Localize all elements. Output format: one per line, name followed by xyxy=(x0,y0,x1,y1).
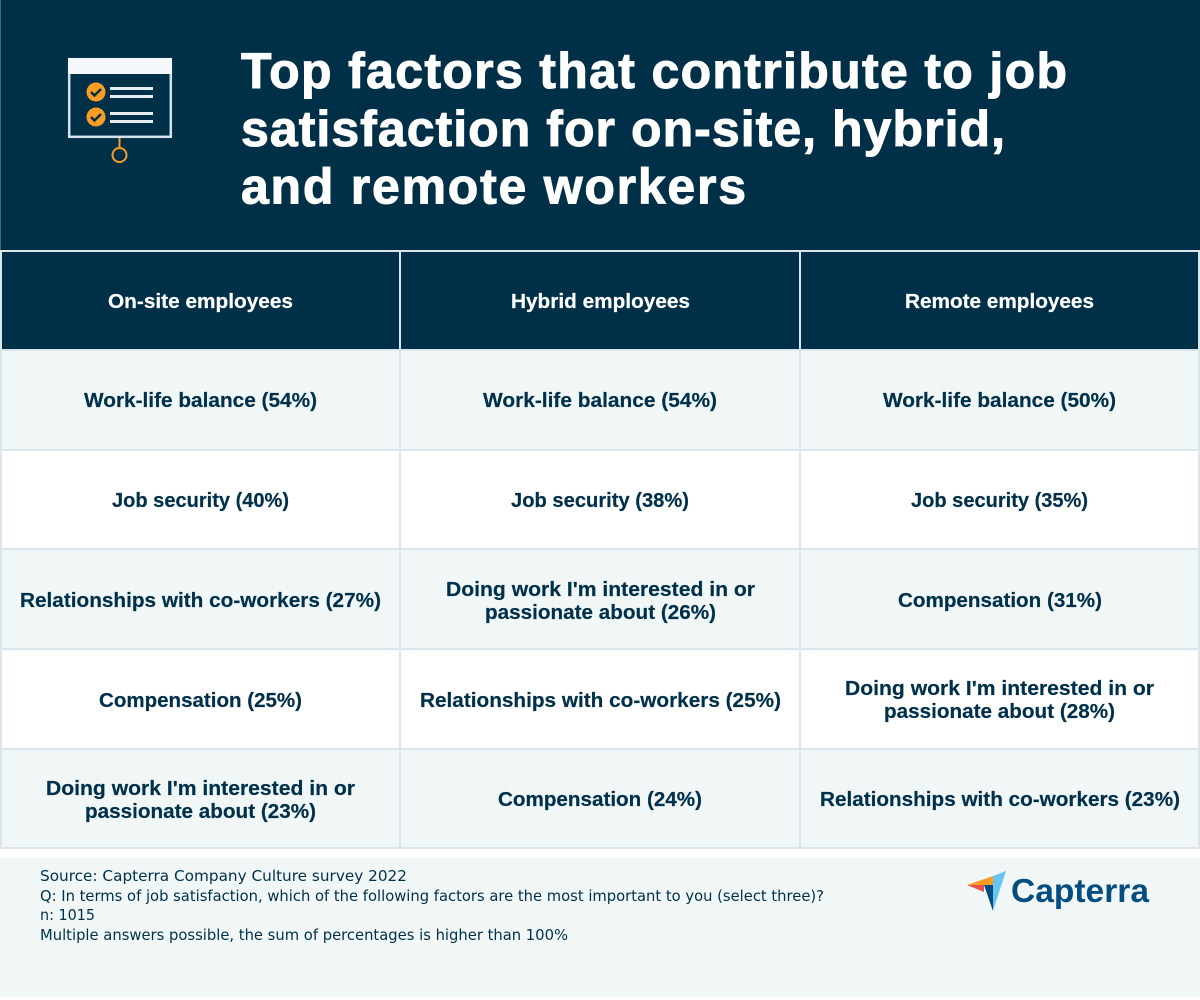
title: Top factors that contribute to job xyxy=(241,43,1067,99)
source notes xyxy=(40,867,824,944)
row 1: Work-life balance (54%) xyxy=(483,390,717,412)
row 3 xyxy=(20,579,1102,624)
row 3: Compensation (31%) xyxy=(898,590,1102,612)
row 1: Work-life balance (50%) xyxy=(883,390,1116,412)
title: satisfaction for on-site, hybrid, xyxy=(241,101,1005,157)
row 4: Doing work I'm interested in or xyxy=(845,678,1154,700)
row 2: Job security (40%) xyxy=(112,490,289,512)
column headings: Hybrid employees xyxy=(511,291,690,313)
row 1: Work-life balance (54%) xyxy=(84,390,317,412)
row 5: Relationships with co-workers (23%) xyxy=(820,789,1180,811)
logo: Capterra: Capterra xyxy=(1011,872,1150,909)
header banner xyxy=(0,0,1200,250)
row 2: Job security (38%) xyxy=(511,490,689,512)
row 4: Relationships with co-workers (25%) xyxy=(420,690,781,712)
table xyxy=(0,250,1200,849)
icon: presentation board with checklist xyxy=(68,58,172,162)
source notes: Source: Capterra Company Culture survey 2022 xyxy=(40,867,407,885)
row 5: passionate about (23%) xyxy=(85,801,316,823)
row 3: Doing work I'm interested in or xyxy=(446,579,755,601)
row 5: Doing work I'm interested in or xyxy=(46,778,355,800)
row 2: Job security (35%) xyxy=(911,490,1088,512)
logo: Capterra xyxy=(967,871,1150,911)
row 5 xyxy=(46,778,1180,823)
row 1 xyxy=(84,390,1116,412)
row 4 xyxy=(99,678,1154,723)
row 4: passionate about (28%) xyxy=(884,701,1115,723)
row 4: Compensation (25%) xyxy=(99,690,302,712)
column headings xyxy=(108,291,1094,313)
header left edge line xyxy=(0,0,1,250)
source notes: n: 1015 xyxy=(40,906,95,924)
title: and remote workers xyxy=(241,158,746,214)
source notes: Multiple answers possible, the sum of percentages is higher than 100% xyxy=(40,926,568,944)
footer panel xyxy=(0,858,1200,997)
table background grid xyxy=(0,250,1200,849)
title xyxy=(241,43,1067,214)
row 2 xyxy=(112,490,1088,512)
column headings: Remote employees xyxy=(905,291,1094,313)
column headings: On-site employees xyxy=(108,291,293,313)
source notes: Q: In terms of job satisfaction, which of the following factors are the most important to you (select three)? xyxy=(40,887,824,905)
row 3: passionate about (26%) xyxy=(485,602,716,624)
row 3: Relationships with co-workers (27%) xyxy=(20,590,381,612)
row 5: Compensation (24%) xyxy=(498,789,702,811)
